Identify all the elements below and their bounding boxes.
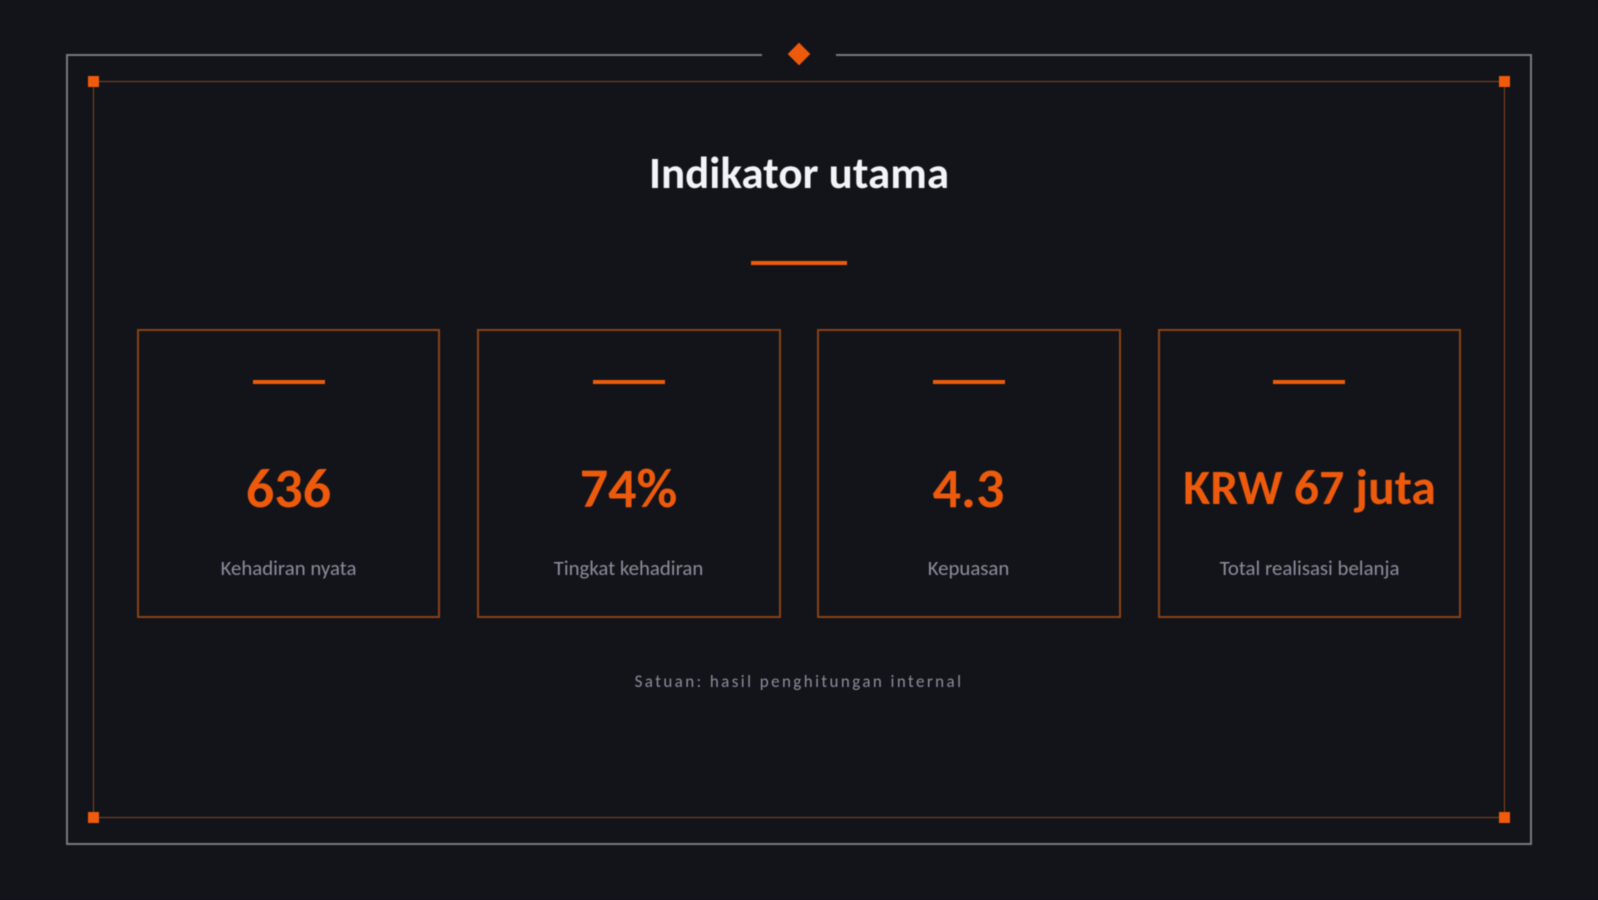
title underline	[751, 261, 847, 265]
panel: Kehadiran nyata: 636	[246, 455, 331, 523]
icon: top diamond	[788, 43, 810, 66]
panel: Kepuasan: 4.3	[933, 455, 1004, 523]
outer frame left side	[66, 54, 68, 845]
corner square bottom right	[1499, 812, 1510, 823]
panel: Kehadiran nyata	[137, 329, 440, 618]
title: Indikator utama	[649, 146, 949, 201]
panel: Kepuasan: Kepuasan	[928, 555, 1009, 581]
panel: Total realisasi belanja: KRW 67 juta	[1183, 458, 1436, 518]
panel: Tingkat kehadiran: 74%	[580, 455, 677, 523]
footnote: Satuan: hasil penghitungan internal	[635, 671, 963, 692]
panel: Tingkat kehadiran: Tingkat kehadiran	[554, 555, 703, 581]
corner square top left	[88, 76, 99, 87]
outer frame bottom side	[66, 843, 1532, 845]
outer frame top left segment	[66, 54, 762, 56]
inner frame	[93, 81, 1505, 818]
outer frame right side	[1530, 54, 1532, 845]
panel: Tingkat kehadiran	[477, 329, 781, 618]
corner square bottom left	[88, 812, 99, 823]
corner square top right	[1499, 76, 1510, 87]
outer frame top right segment	[836, 54, 1532, 56]
panel: Total realisasi belanja	[1158, 329, 1461, 618]
panel: Kehadiran nyata: Kehadiran nyata	[221, 555, 356, 581]
panel: Total realisasi belanja: Total realisasi belanja	[1220, 555, 1399, 581]
panel: Kepuasan	[817, 329, 1121, 618]
